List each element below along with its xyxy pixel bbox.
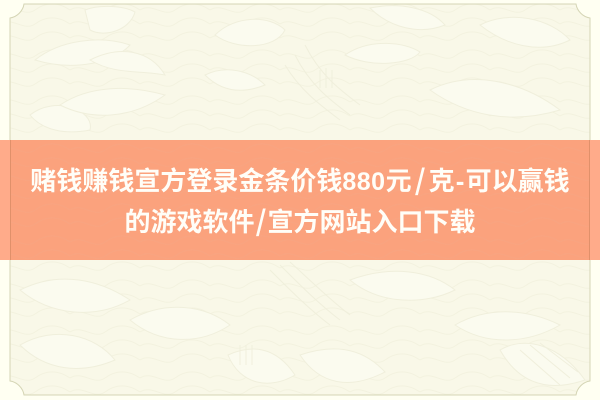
banner band [0, 140, 600, 260]
headline text: / [256, 200, 266, 240]
headline text: / [415, 159, 426, 199]
headline text: 赌钱赚钱宣方登录金条价钱880元 克 可以赢钱 [30, 166, 570, 196]
headline text: 的游戏软件 宣方网站入口下载 [124, 207, 476, 237]
headline text: - [456, 166, 464, 196]
headline text [30, 159, 570, 240]
